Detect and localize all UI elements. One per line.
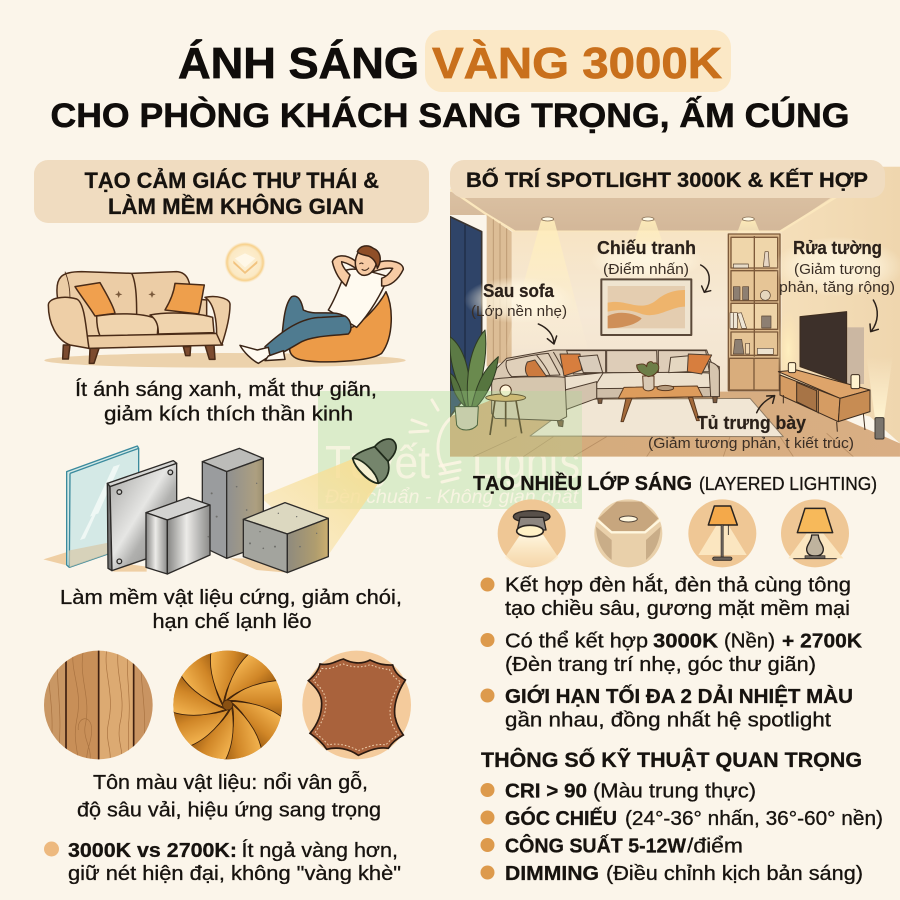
icon: floor lamp [688,499,756,567]
panel: left heading: TẠO CẢM GIÁC THƯ THÁI & [84,168,379,193]
label: Rửa tường: phản, tăng rộng) [779,279,895,296]
low concrete block [243,503,328,573]
label: Sau sofa: (Lớp nền nhẹ) [471,303,567,320]
tip 3: GIỚI HẠN TỐI ĐA 2 DẢI NHIỆT MÀU [505,684,853,708]
text: caption 3 [77,771,381,822]
text: caption 2: Làm mềm vật liệu cứng, giảm chói, [60,587,402,609]
title line 1 dark: ÁNH SÁNG [178,38,419,88]
bullet [44,842,59,856]
spec: dimming: (Điều chỉnh kịch bản sáng) [606,863,863,885]
watermark [318,391,582,509]
swatch: wood [43,650,153,760]
tv wall glow [847,327,864,384]
illustration: hard materials under spotlight [43,439,396,574]
tip 2: (Đèn trang trí nhẹ, góc thư giãn) [505,654,816,676]
label: Sau sofa: Sau sofa [483,281,555,301]
text: caption 3: Tôn màu vật liệu: nổi vân gỗ, [93,771,368,794]
tip 2: 3000K [653,630,719,652]
text: caption 1: Ít ánh sáng xanh, mắt thư giãn, [75,378,377,401]
spec: power [480,834,743,858]
room shell [450,167,900,458]
coffee table [618,362,703,422]
tip 1 [480,574,851,620]
sofa [48,272,230,363]
spec: CRI: CRI > 90 [505,780,587,802]
label: Sau sofa [471,281,567,320]
spec: beam angle: GÓC CHIẾU [505,806,617,830]
label glows [464,237,900,323]
rug [530,398,783,437]
tip 3 [480,684,853,732]
text: caption 3: độ sâu vải, hiệu ứng sang trọng [77,800,381,822]
spec: CRI: (Màu trung thực) [593,780,756,802]
callout: 3000K vs 2700K: giữ nét hiện đại, không "vàng khè" [68,863,401,885]
tv and console [778,312,870,432]
panel: left heading: LÀM MỀM KHÔNG GIAN [108,194,364,219]
framed painting [601,279,691,335]
illustration: living room with spotlights [450,167,900,458]
tip 2: (Nền) [724,630,775,652]
label: Chiếu tranh: (Điểm nhấn) [603,261,689,278]
icon: cove light [594,499,662,567]
label: Rửa tường [779,238,895,296]
spec: power: /điểm [687,836,743,858]
steel plate [107,461,177,571]
display shelf [728,234,780,391]
tip 2: Có thể kết hợp [505,630,648,652]
small steel block [146,497,210,574]
text: caption 1 [75,378,377,426]
title line 2: CHO PHÒNG KHÁCH SANG TRỌNG, ẤM CÚNG [50,97,850,135]
panel: right heading: BỐ TRÍ SPOTLIGHT 3000K & KẾT HỢP [466,168,868,192]
panel: right heading [450,160,885,198]
callout: 3000K vs 2700K: Ít ngả vàng hơn, [242,839,398,862]
callout: 3000K vs 2700K [44,839,401,885]
callout: 3000K vs 2700K: 3000K vs 2700K: [68,840,237,862]
heading: layered lighting: (LAYERED LIGHTING) [699,474,877,494]
icon: table lamp [781,499,849,567]
watermark tint over room [450,391,582,457]
panel: left heading [34,160,429,223]
tall concrete block [202,448,263,558]
spec: beam angle [480,806,883,830]
icon: spotlight lamp [353,439,396,483]
label: Rửa tường: (Giảm tương [794,261,881,278]
label: Tủ trưng bày: (Giảm tương phản, t kiết trúc) [648,435,854,452]
icon: glowing check [224,242,266,283]
uplight [869,370,890,440]
bullet list: layered lighting tips [480,574,863,732]
light beam [260,458,378,555]
arrows [538,265,878,413]
title line 1 accent: VÀNG 3000K [432,38,722,88]
text: caption 1: giảm kích thích thần kinh [104,404,353,426]
text: caption 2 [60,587,402,633]
watermark: Đèn chuẩn - Không gian chất [325,487,579,508]
sectional sofa [492,350,719,427]
swatch: leather [302,651,411,759]
heading: technical specs: THÔNG SỐ KỸ THUẬT QUAN TRỌNG [481,748,862,772]
ceiling spotlights [510,216,759,336]
potted plant [450,330,498,430]
title [50,30,850,135]
glass panel [67,446,139,567]
icon: recessed downlight [498,499,566,567]
relaxing man on bean bag [240,246,403,363]
watermark: Lights [472,436,580,488]
label: Chiếu tranh: Chiếu tranh [597,238,696,258]
material swatches [44,650,411,760]
watermark bulb icon [410,400,465,482]
spec: power: CÔNG SUẤT 5-12W [505,834,686,858]
text: caption 2: hạn chế lạnh lẽo [152,611,312,633]
label: Tủ trưng bày [648,413,854,452]
label: Chiếu tranh [597,238,696,278]
tip 2 [480,630,863,676]
spec: dimming: DIMMING [505,863,599,885]
heading: layered lighting: TẠO NHIỀU LỚP SÁNG [473,471,692,495]
spec: beam angle: (24°-36° nhấn, 36°-60° nền) [625,808,883,830]
tip 3: gần nhau, đồng nhất hệ spotlight [505,710,831,732]
side table with lamp [486,385,526,435]
spec: CRI [480,780,756,802]
spec: dimming [480,863,863,885]
illustration: sofa and relaxing man [44,242,406,368]
heading: layered lighting [473,471,877,495]
window and curtain [450,215,512,417]
layered lighting icons [498,499,849,567]
label: Tủ trưng bày: Tủ trưng bày [697,413,806,433]
watermark: Tuyết [325,436,430,488]
title highlight pill [425,30,731,92]
tip 1: tạo chiều sâu, gương mặt mềm mại [505,598,850,620]
room labels [471,238,895,452]
spec list [480,780,883,885]
tip 2: + 2700K [782,630,863,652]
tip 1: Kết hợp đèn hắt, đèn thả cùng tông [505,574,851,596]
label: Rửa tường: Rửa tường [793,238,882,258]
swatch: silk fabric [173,650,282,760]
